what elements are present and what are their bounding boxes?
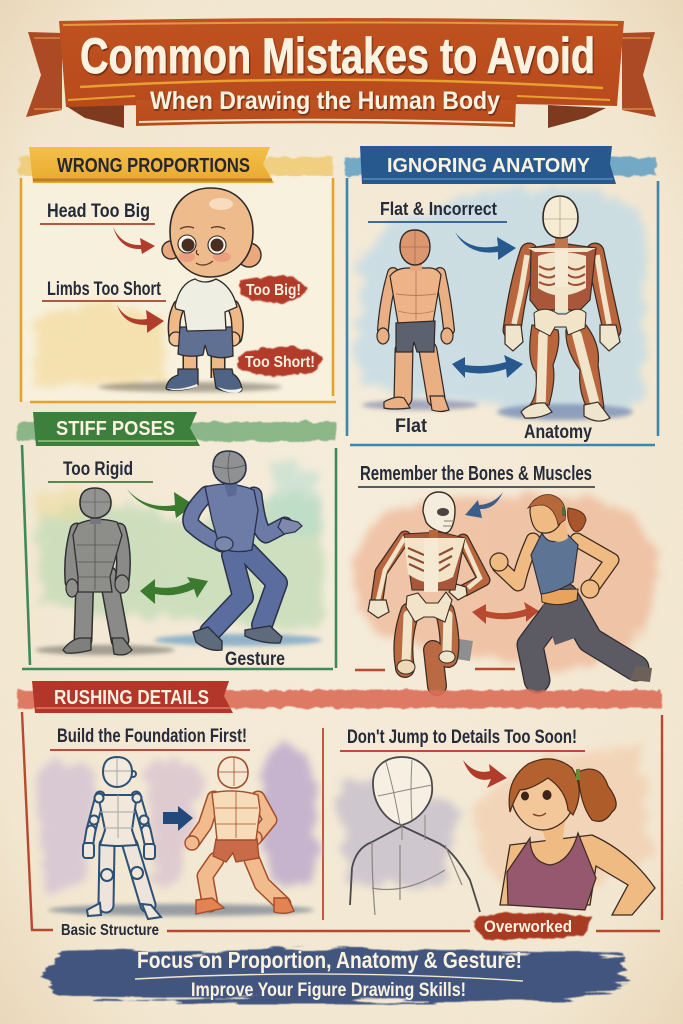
rigid mannequin: [35, 488, 175, 655]
arrow: rigid to gesture: [127, 489, 194, 518]
ground shadow: [48, 904, 314, 916]
skeleton runner: [368, 492, 484, 686]
panel: stiff poses: [18, 412, 336, 670]
left ribbon tail: [26, 32, 124, 128]
callout: too short: Too Short!: [245, 354, 315, 371]
purple wash left: [35, 746, 316, 895]
arrow: to head: [113, 227, 155, 254]
panel: ignoring anatomy: [345, 146, 658, 445]
arrow: sketch to detailed: [463, 760, 507, 788]
label: too rigid: Too Rigid: [63, 459, 133, 480]
caption: anatomy: Anatomy: [524, 422, 592, 443]
brush stroke: [38, 949, 628, 1002]
label: head too big: Head Too Big: [47, 201, 150, 222]
heading ribbon: STIFF POSES: [56, 418, 175, 440]
detailed woman: [500, 759, 655, 915]
heading ribbon: [360, 146, 616, 184]
double arrow: compare runners: [472, 602, 539, 624]
panel: wrong proportions: [20, 147, 336, 402]
caption: gesture: Gesture: [225, 649, 285, 670]
finished orange figure: [185, 757, 294, 914]
sketch bust: [350, 757, 480, 915]
closing banner: [38, 947, 628, 1002]
flat figure: [362, 230, 478, 412]
closing line two: Improve Your Figure Drawing Skills!: [191, 980, 466, 1001]
heading ribbon: RUSHING DETAILS: [54, 687, 209, 709]
callout: too big: [240, 276, 308, 303]
arrow: structure to finished: [163, 806, 193, 831]
right ribbon tail: [548, 32, 656, 128]
label: flat and incorrect: Flat & Incorrect: [380, 198, 497, 219]
orange wash: [352, 495, 656, 668]
label: don't jump to details too soon: Don't Jump to Details Too Soon!: [347, 726, 577, 748]
subtitle: When Drawing the Human Body: [150, 87, 500, 115]
anatomy figure: [497, 196, 633, 421]
closing line one: Focus on Proportion, Anatomy & Gesture!: [137, 947, 522, 973]
heading ribbon: IGNORING ANATOMY: [387, 155, 591, 177]
basic structure figure: [83, 757, 161, 919]
caption: basic structure: Basic Structure: [61, 922, 159, 939]
gesture figure: [154, 451, 322, 650]
panel frame: [18, 690, 662, 931]
panel frame and wash: [345, 157, 658, 445]
panel: rushing details: [18, 681, 662, 940]
arrow: flat to anatomy: [455, 232, 516, 260]
heading ribbon: [29, 147, 274, 183]
caption: flat: Flat: [395, 416, 428, 437]
label: remember the bones and muscles: Remember the Bones & Muscles: [360, 463, 592, 485]
callout: too big: Too Big!: [246, 282, 301, 299]
washes right: [336, 740, 650, 900]
heading ribbon: [32, 681, 233, 713]
heading ribbon: [33, 412, 200, 446]
dashes: [355, 669, 515, 670]
double arrow: compare poses: [140, 577, 208, 604]
panel: remember bones and muscles: [352, 463, 656, 686]
panel frame and wash: [18, 422, 336, 669]
heading ribbon: WRONG PROPORTIONS: [57, 155, 250, 177]
callout: too short: [238, 347, 323, 376]
label: limbs too short: Limbs Too Short: [47, 279, 162, 300]
panel frame: [20, 157, 336, 402]
arrow: to limbs: [117, 305, 164, 333]
cartoon boy: [98, 188, 282, 393]
label: build the foundation first: Build the Foundation First!: [57, 725, 247, 747]
callout: overworked: Overworked: [484, 917, 572, 936]
woman runner: [490, 495, 652, 682]
ribbon body: [59, 18, 624, 107]
double arrow: compare figures: [452, 355, 523, 378]
arrow: to skeleton: [465, 492, 503, 518]
callout: overworked: [473, 913, 592, 940]
title banner: [26, 18, 656, 128]
